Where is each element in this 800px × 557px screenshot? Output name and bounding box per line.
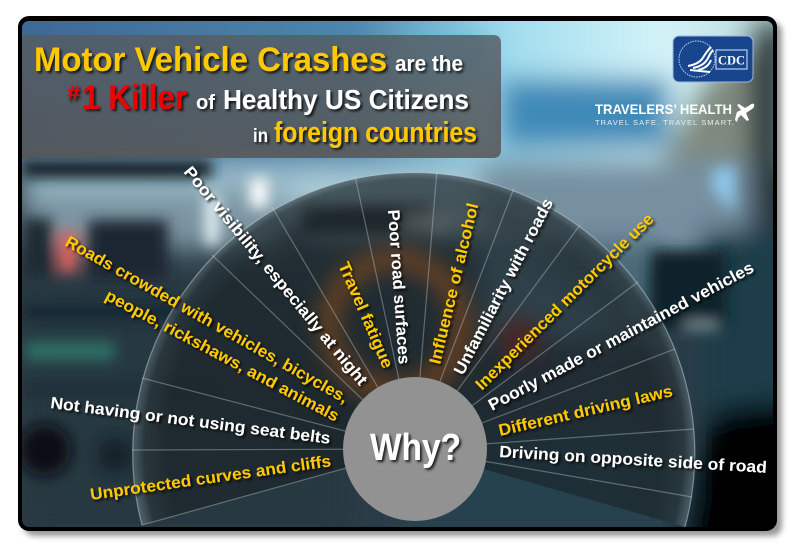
title text: Motor Vehicle Crashes <box>34 41 387 79</box>
Travelers' Health wordmark <box>595 101 734 127</box>
CDC logo badge <box>673 36 753 82</box>
reason: alcohol: Influence of alcohol <box>426 201 482 366</box>
Travelers' Health wordmark: TRAVELERS’ HEALTH <box>595 101 732 117</box>
title text: 1 Killer <box>82 79 187 117</box>
reason: travel fatigue: Travel fatigue <box>334 259 396 371</box>
reason: poorly maintained vehicles: Poorly made or maintained vehicles <box>485 259 757 415</box>
Travelers' Health wordmark: TRAVEL SAFE. TRAVEL SMART. <box>595 118 734 127</box>
reason: motorcycle use: Inexperienced motorcycle use <box>472 210 658 394</box>
reason: crowded roads, second line: people, rickshaws, and animals <box>102 287 342 426</box>
hub circle <box>343 377 487 521</box>
reason: curves and cliffs: Unprotected curves and cliffs <box>89 452 332 504</box>
title text <box>34 41 477 149</box>
panel: spoke fan of reasons <box>132 170 695 527</box>
reason: crowded roads: Roads crowded with vehicles, bicycles, <box>62 233 351 407</box>
CDC logo badge: CDC <box>718 52 745 68</box>
title text: # <box>67 82 80 105</box>
reason: seat belts: Not having or not using seat belts <box>49 394 331 448</box>
reason: opposite side: Driving on opposite side of road <box>499 443 767 477</box>
reason: unfamiliar roads: Unfamiliarity with roads <box>451 196 557 378</box>
reason: poor visibility: Poor visibility, especially at night <box>180 163 371 389</box>
title text: in <box>253 126 268 147</box>
title panel <box>22 35 501 158</box>
title text: of <box>196 92 215 114</box>
title text: foreign countries <box>274 117 477 149</box>
reason: driving laws: Different driving laws <box>497 382 674 440</box>
hub label: Why? <box>370 427 461 469</box>
instrument cluster glow <box>329 259 540 391</box>
title text: are the <box>395 51 463 76</box>
title text: Healthy US Citizens <box>223 84 469 115</box>
icon: airplane <box>735 104 754 122</box>
reason labels <box>49 163 767 504</box>
reason: poor road surfaces: Poor road surfaces <box>384 209 413 365</box>
